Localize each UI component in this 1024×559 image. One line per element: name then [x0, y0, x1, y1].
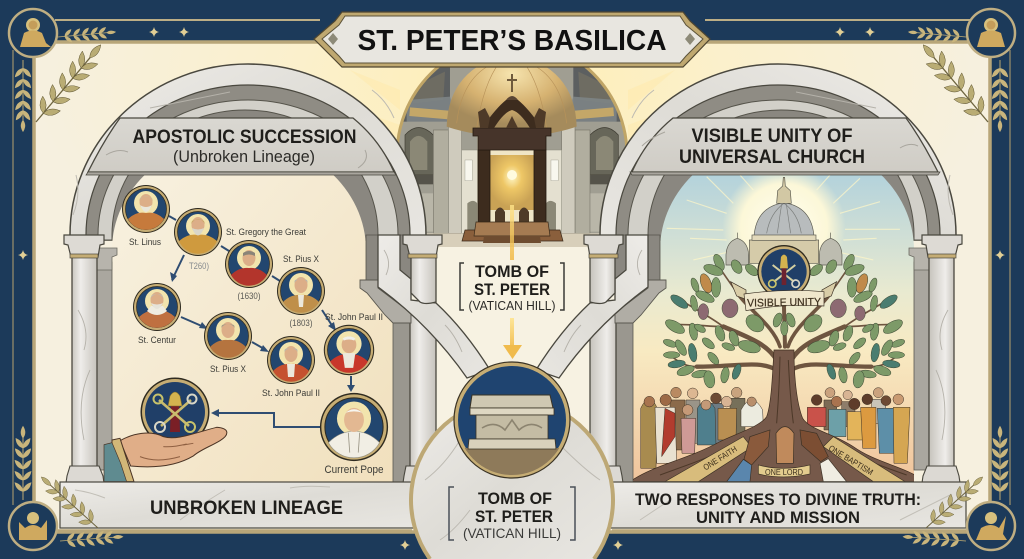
panel: lineage tree — [104, 185, 388, 482]
bottom banner: unbroken lineage: UNBROKEN LINEAGE — [150, 497, 343, 519]
bottom banner: two responses: UNITY AND MISSION — [696, 509, 860, 527]
apse wall — [477, 136, 534, 222]
medallion: top left evangelist — [9, 9, 57, 57]
labels: (1630) — [238, 291, 260, 302]
portrait: Current Pope — [320, 393, 388, 461]
laurel: bottom left — [59, 528, 124, 550]
heading banner: visible unity — [630, 118, 940, 175]
labels: St. Gregory the Great — [226, 227, 306, 238]
floor — [426, 233, 600, 247]
labels: St. John Paul II — [262, 388, 320, 399]
medallion: top right evangelist — [967, 9, 1015, 57]
tree branches — [670, 263, 898, 370]
lineage arrows — [169, 216, 351, 427]
callout: tomb label upper: ST. PETER — [474, 280, 550, 299]
gold bottom rule — [34, 529, 990, 533]
pillars right — [536, 235, 962, 483]
bottom banner: two responses — [605, 482, 966, 528]
unity arms and ribbons — [665, 427, 905, 482]
portrait: St. Pius X lower — [204, 312, 252, 360]
medallion: bottom left evangelist — [9, 502, 57, 550]
portrait: (1630) pope — [225, 240, 273, 288]
icon: basilica dome — [726, 177, 842, 265]
arch: right — [600, 64, 956, 240]
labels: St. John Paul II — [325, 312, 383, 323]
title plaque — [314, 12, 710, 67]
medallion: bottom right evangelist — [967, 502, 1015, 550]
light beam — [503, 205, 522, 359]
laurel: right lower vertical — [990, 426, 1010, 500]
portrait: St. John Paul II lower — [267, 336, 315, 384]
panel: tree of visible unity — [630, 165, 925, 482]
heading text line 2: UNIVERSAL CHURCH — [679, 147, 865, 168]
heading text: VISIBLE UNITY OF — [692, 126, 852, 147]
heading text: APOSTOLIC SUCCESSION — [132, 126, 356, 148]
people: right group — [807, 388, 910, 463]
ribbon labels — [701, 296, 875, 477]
labels — [129, 227, 384, 476]
labels: T260) — [189, 261, 209, 272]
tomb marble circle: ST. PETER — [475, 507, 553, 526]
portrait: St. Linus — [122, 185, 170, 233]
bottom banner: two responses: TWO RESPONSES TO DIVINE TRUTH: — [635, 491, 921, 509]
tree trunk and roots — [630, 350, 925, 482]
heading banner: apostolic succession — [86, 118, 396, 175]
visible unity banner — [731, 282, 837, 311]
right opening: sky — [633, 138, 914, 482]
tree leaves — [662, 253, 906, 389]
left opening — [112, 138, 393, 482]
subheading text: (Unbroken Lineage) — [173, 147, 315, 166]
ribbon labels: VISIBLE UNITY — [747, 296, 822, 310]
icon: open hand — [104, 427, 227, 482]
labels: St. Pius X — [283, 254, 320, 265]
portrait: St. Gregory the Great — [174, 208, 222, 256]
icon: sarcophagus medallion — [450, 362, 575, 480]
labels: St. Linus — [129, 237, 161, 248]
tomb marble circle — [411, 399, 613, 559]
laurel: left vertical — [13, 60, 33, 132]
laurel: cream bottom right — [919, 469, 990, 536]
sunburst — [667, 175, 900, 260]
ribbon labels: ONE LORD — [765, 467, 803, 477]
icon: papal arms — [140, 378, 210, 446]
ribbon labels: ONE FAITH — [701, 444, 739, 472]
laurel: bottom right — [902, 528, 967, 550]
lower cream area — [396, 247, 628, 483]
labels: St. Pius X — [210, 364, 247, 375]
ribbon labels: ONE BAPTISM — [827, 443, 875, 477]
callout: tomb label upper: TOMB OF — [475, 262, 549, 281]
portrait: St. Centur — [133, 283, 181, 331]
baldachin — [462, 74, 563, 243]
panel: central basilica interior — [396, 68, 628, 247]
callout: tomb label upper — [460, 262, 564, 313]
tomb marble circle: TOMB OF — [478, 489, 552, 508]
arch: left — [70, 64, 426, 240]
people: left group — [641, 387, 763, 468]
callout: tomb label upper: (VATICAN HILL) — [468, 298, 556, 313]
laurel: top left — [57, 24, 117, 45]
portrait: St. Pius X — [277, 267, 325, 315]
portrait: St. John Paul II upper — [324, 325, 374, 375]
labels: (1803) — [290, 318, 312, 329]
laurel: cream bottom left — [34, 469, 105, 536]
labels: St. Centur — [138, 335, 176, 346]
laurel: cream top right — [913, 36, 999, 131]
sun rays — [330, 70, 695, 140]
pillars left — [64, 235, 490, 483]
callout: tomb label lower — [449, 487, 575, 540]
labels: Current Pope — [324, 464, 384, 476]
dome vault — [446, 68, 577, 134]
laurel: left lower vertical — [13, 426, 33, 500]
bottom banner: unbroken lineage — [60, 482, 420, 528]
laurel: top right — [907, 24, 967, 45]
tomb marble circle: (VATICAN HILL) — [463, 526, 561, 541]
laurel: right vertical — [990, 60, 1010, 132]
emblem medallion — [757, 245, 811, 292]
laurel: cream top left — [25, 36, 111, 131]
title text: ST. PETER’S BASILICA — [358, 25, 667, 57]
